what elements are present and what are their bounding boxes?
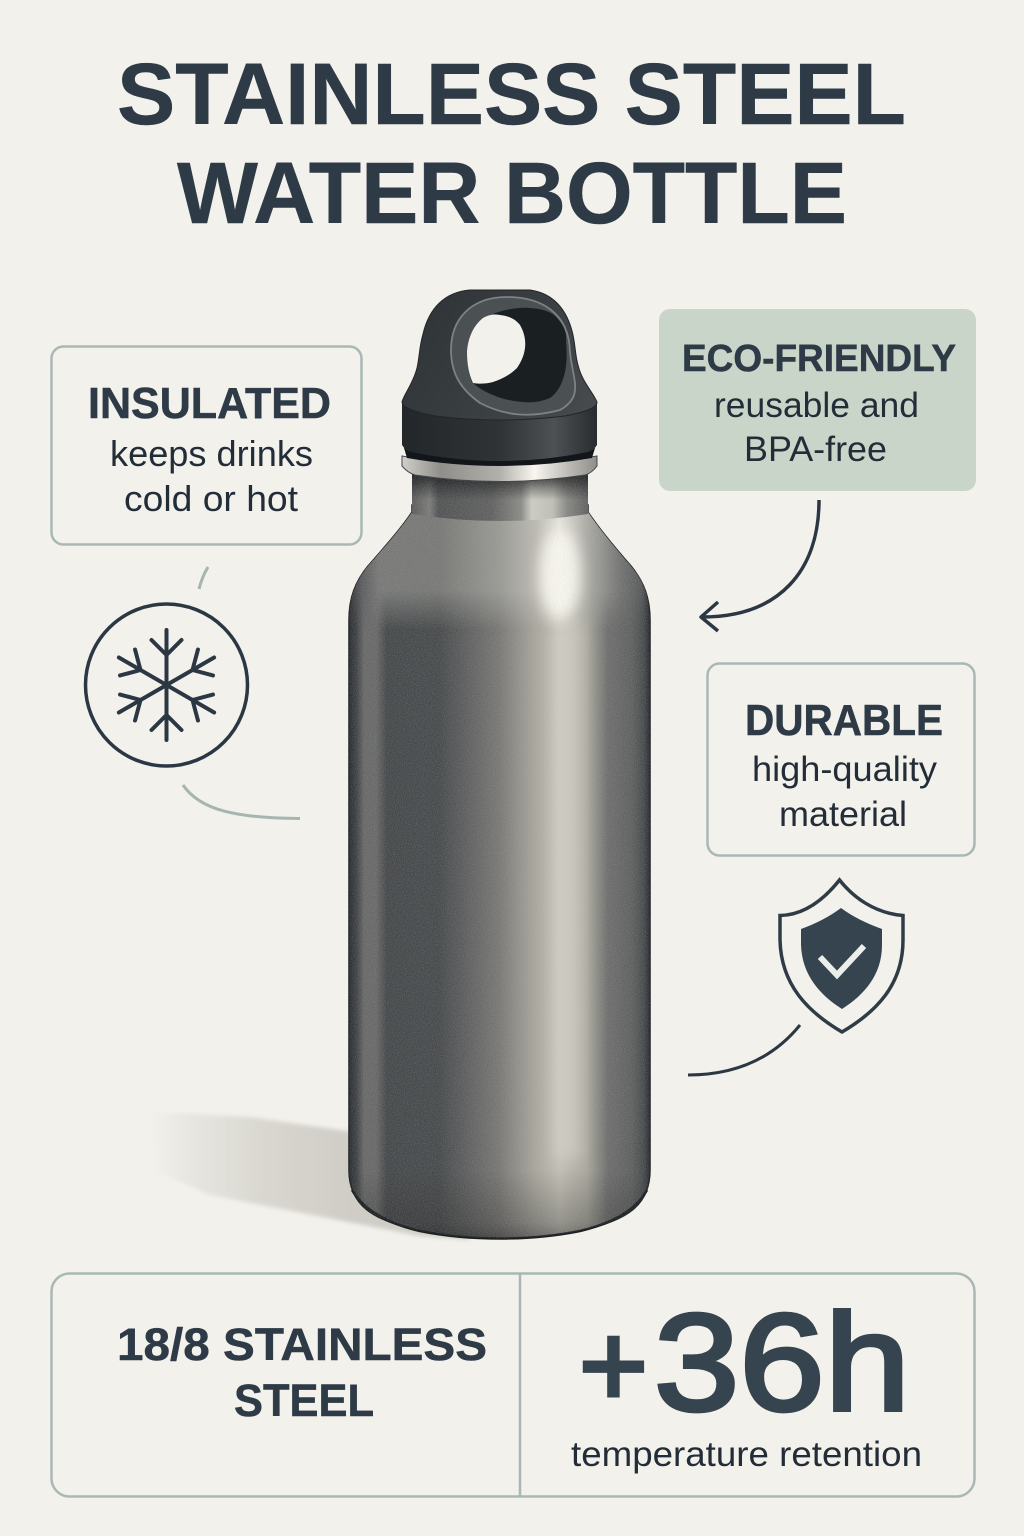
bottle base shading (349, 1170, 650, 1238)
panel: specifications: 18/8 STAINLESS (117, 1319, 487, 1370)
arrow: eco-friendly to bottle (701, 500, 819, 631)
big number: + (579, 1300, 648, 1432)
panel: durable: material (779, 795, 907, 834)
icon: shield with check (780, 880, 903, 1032)
loop hole (467, 314, 525, 384)
bottle shoulder (350, 512, 649, 623)
bottle body (349, 505, 650, 1238)
panel: insulated: keeps drinks (110, 433, 313, 474)
dark gasket (404, 448, 595, 466)
panel: eco-friendly: reusable and (714, 386, 919, 425)
big number: 36h (654, 1286, 910, 1440)
panel: durable (708, 664, 974, 856)
panel: eco-friendly: BPA-free (744, 430, 887, 469)
big number (579, 1286, 910, 1440)
panel: insulated (52, 346, 362, 544)
connector: shield to bottle (688, 1025, 800, 1075)
surface grain (349, 470, 651, 1242)
panel: insulated: cold or hot (124, 478, 298, 519)
bottle shadow (150, 1112, 470, 1240)
bottle illustration (349, 290, 651, 1242)
caption: temperature retention (571, 1435, 922, 1474)
panel: eco-friendly (659, 309, 976, 491)
panel: specifications (52, 1274, 974, 1496)
bottle highlight (540, 529, 582, 1160)
loop rim (451, 297, 575, 415)
icon: snowflake (86, 604, 248, 766)
cap band (402, 403, 597, 461)
steel ring (402, 456, 597, 482)
loop recess (468, 308, 567, 402)
panel: eco-friendly: ECO-FRIENDLY (682, 338, 956, 380)
cap top with loop (402, 290, 597, 420)
title: WATER BOTTLE (177, 145, 847, 242)
connector: snowflake to bottle (183, 785, 300, 818)
connector: insulated to snowflake (199, 567, 208, 589)
panel: durable: high-quality (752, 750, 938, 789)
title: STAINLESS STEEL (117, 46, 906, 143)
panel: specifications: STEEL (234, 1375, 374, 1426)
panel: insulated: INSULATED (88, 379, 331, 428)
panel: durable: DURABLE (745, 696, 943, 745)
bottle neck (412, 470, 588, 521)
title (117, 46, 906, 242)
